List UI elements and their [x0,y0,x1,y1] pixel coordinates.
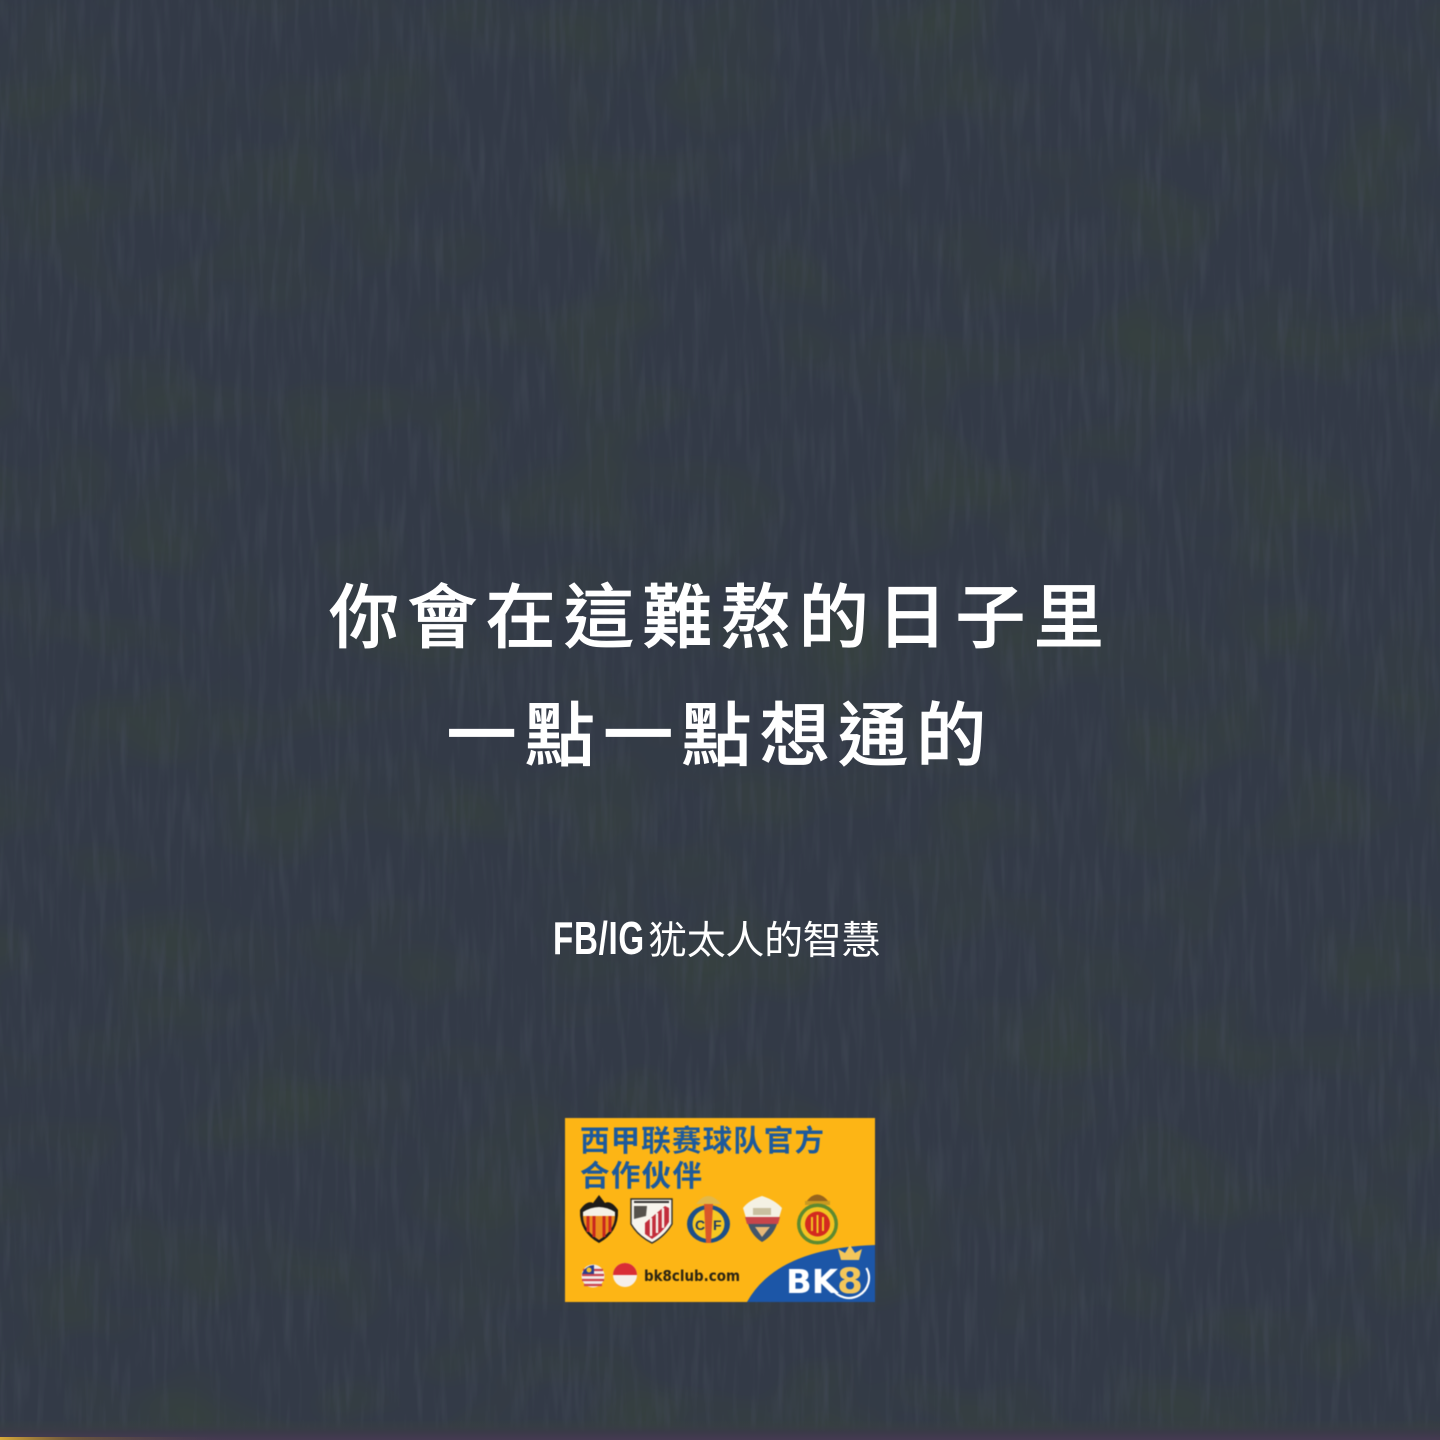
banner url: bk8club.com [644,1267,740,1285]
sponsor banner [564,1117,876,1303]
crest: Elche [743,1196,782,1242]
crest: Athletic Club [631,1199,672,1243]
banner heading [580,1118,824,1195]
crest: Villarreal: C [695,1217,705,1233]
headline line 1: 你會在這難熬的日子里 [329,562,1112,663]
credit text: FB/IG [553,912,645,964]
banner heading: 合作伙伴 [580,1153,702,1195]
crest: Valencia [580,1195,618,1243]
headline line 2: 一點一點想通的 [446,680,995,781]
BK8 logo: BK [786,1262,839,1301]
crest: Villarreal: F [713,1217,722,1233]
BK8 logo [747,1245,876,1305]
BK8 logo: 8 [837,1262,863,1302]
credit text: 犹太人的智慧 [648,910,880,966]
crest: Mallorca [797,1194,838,1244]
flag: Malaysia [582,1264,604,1288]
crest: Villarreal [687,1196,730,1243]
flag: Singapore [613,1263,637,1287]
banner heading: 西甲联赛球队官方 [580,1118,824,1160]
